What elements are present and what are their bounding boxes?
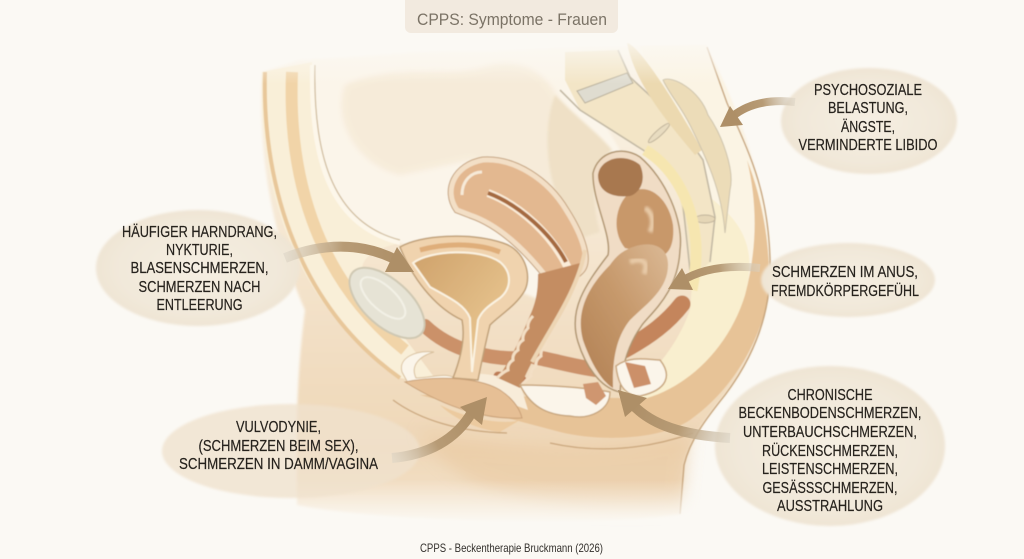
- crease lines: [393, 400, 693, 449]
- cavity wash: [342, 63, 581, 210]
- callout: right middle oval: [761, 243, 935, 317]
- callout: top right oval: ÄNGSTE,: [841, 119, 895, 136]
- callout: top right oval: VERMINDERTE LIBIDO: [798, 137, 938, 154]
- callout: top right oval: BELASTUNG,: [828, 100, 908, 117]
- callout: bottom right oval: GESÄSSSCHMERZEN,: [762, 480, 898, 497]
- wash behind uterus: [548, 95, 612, 240]
- title: CPPS: Symptome - Frauen: [417, 10, 607, 29]
- callout: bottom right oval: LEISTENSCHMERZEN,: [762, 461, 898, 478]
- rectum and sigmoid colon: [575, 151, 681, 392]
- callout: bottom right oval: AUSSTRAHLUNG: [777, 498, 883, 515]
- abdominal cavity: [312, 50, 620, 300]
- callout: left oval: NYKTURIE,: [166, 242, 233, 259]
- top fade of illustration: [250, 34, 770, 84]
- bladder and urethra: [400, 236, 528, 380]
- anal canal pouch with sphincter: [616, 359, 666, 396]
- arrow: to pelvic floor: [618, 390, 730, 438]
- callout: bottom right oval: UNTERBAUCHSCHMERZEN,: [743, 424, 917, 441]
- callout: left oval: HÄUFIGER HARNDRANG,: [122, 224, 277, 241]
- callout: top right oval: [781, 68, 957, 174]
- pelvic floor muscles: [425, 304, 682, 380]
- vagina: [497, 250, 585, 388]
- callout: bottom right oval: RÜCKENSCHMERZEN,: [762, 442, 898, 460]
- uterus: [451, 160, 585, 279]
- abdominal wall bands: [262, 62, 440, 385]
- callout: left oval: BLASENSCHMERZEN,: [130, 260, 268, 277]
- callout: bottom right oval: CHRONISCHE: [788, 387, 872, 404]
- callout: bottom right oval: BECKENBODENSCHMERZEN,: [738, 405, 922, 422]
- callout: left oval: SCHMERZEN NACH: [138, 279, 260, 296]
- footer credit: CPPS - Beckentherapie Bruckmann (2026): [420, 541, 603, 555]
- outer back line: [680, 47, 770, 514]
- pubic bone: [337, 255, 437, 351]
- bottom fade of illustration: [280, 480, 700, 525]
- arrow: to bladder: [285, 247, 414, 272]
- callout: right middle oval: FREMDKÖRPERGEFÜHL: [771, 282, 919, 300]
- posterior body wall: [420, 160, 769, 438]
- perineal pouch with muscle: [520, 382, 610, 417]
- arrow: to vulva: [392, 397, 487, 458]
- callout: bottom left oval: [162, 404, 420, 498]
- callout: top right oval: PSYCHOSOZIALE: [814, 82, 922, 99]
- white tissue below muscles: [455, 374, 528, 410]
- callout: bottom left oval: VULVODYNIE,: [236, 419, 321, 436]
- callout: bottom left oval: SCHMERZEN IN DAMM/VAGINA: [179, 456, 379, 473]
- retroperitoneal cream band: [618, 190, 749, 400]
- anatomical illustration: female pelvis cross-section: [261, 43, 770, 521]
- area between spine and back: [640, 45, 770, 300]
- callout: bottom right oval: [715, 366, 945, 526]
- title: [405, 0, 618, 33]
- crus hook: [401, 352, 455, 383]
- callout: left oval: [96, 210, 300, 326]
- body silhouette: [261, 45, 770, 521]
- arrow: to anus: [668, 267, 760, 290]
- lower body watercolor wash: [420, 430, 690, 509]
- spine and sacrum: [560, 43, 731, 280]
- callout: right middle oval: SCHMERZEN IM ANUS,: [772, 264, 918, 281]
- arrow: to lower back: [720, 101, 795, 127]
- vulva and labia: [405, 378, 522, 432]
- callout: left oval: ENTLEERUNG: [156, 297, 242, 314]
- callout: bottom left oval: (SCHMERZEN BEIM SEX),: [198, 438, 358, 455]
- peritoneal yellow stripe: [645, 150, 696, 290]
